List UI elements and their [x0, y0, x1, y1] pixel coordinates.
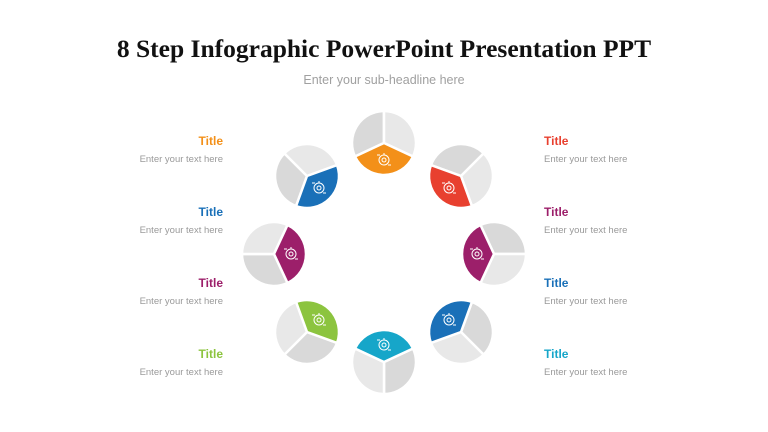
- right text 1: Title: [544, 134, 568, 148]
- text: Enter your text here: [544, 154, 627, 165]
- right text 4: Title: [544, 347, 568, 361]
- left text 2: Title: [199, 205, 223, 219]
- circle 1 top orange: [352, 111, 416, 175]
- right text 3: Title: [544, 276, 568, 290]
- circle 5 bottom teal: [352, 330, 416, 394]
- title: 8 Step Infographic PowerPoint Presentation PPT: [117, 34, 651, 63]
- subheadline: Enter your sub-headline here: [303, 73, 465, 87]
- circle 7 left purple: [242, 222, 306, 286]
- text: Enter your text here: [544, 296, 627, 307]
- icons: [284, 153, 484, 350]
- circle 6 bottom-left green: [262, 287, 352, 377]
- text: Enter your text here: [544, 367, 627, 378]
- circle 4 bottom-right blue: [416, 287, 506, 377]
- circle 8 top-left blue: [262, 131, 352, 221]
- text: Enter your text here: [140, 296, 223, 307]
- text: Enter your text here: [140, 367, 223, 378]
- circle 2 top-right red: [416, 131, 506, 221]
- circle 3 right purple: [462, 222, 526, 286]
- text: Enter your text here: [140, 154, 223, 165]
- text: Enter your text here: [544, 225, 627, 236]
- text: Enter your text here: [140, 225, 223, 236]
- left text 1: Title: [199, 134, 223, 148]
- right text 2: Title: [544, 205, 568, 219]
- left text 3: Title: [199, 276, 223, 290]
- left text 4: Title: [199, 347, 223, 361]
